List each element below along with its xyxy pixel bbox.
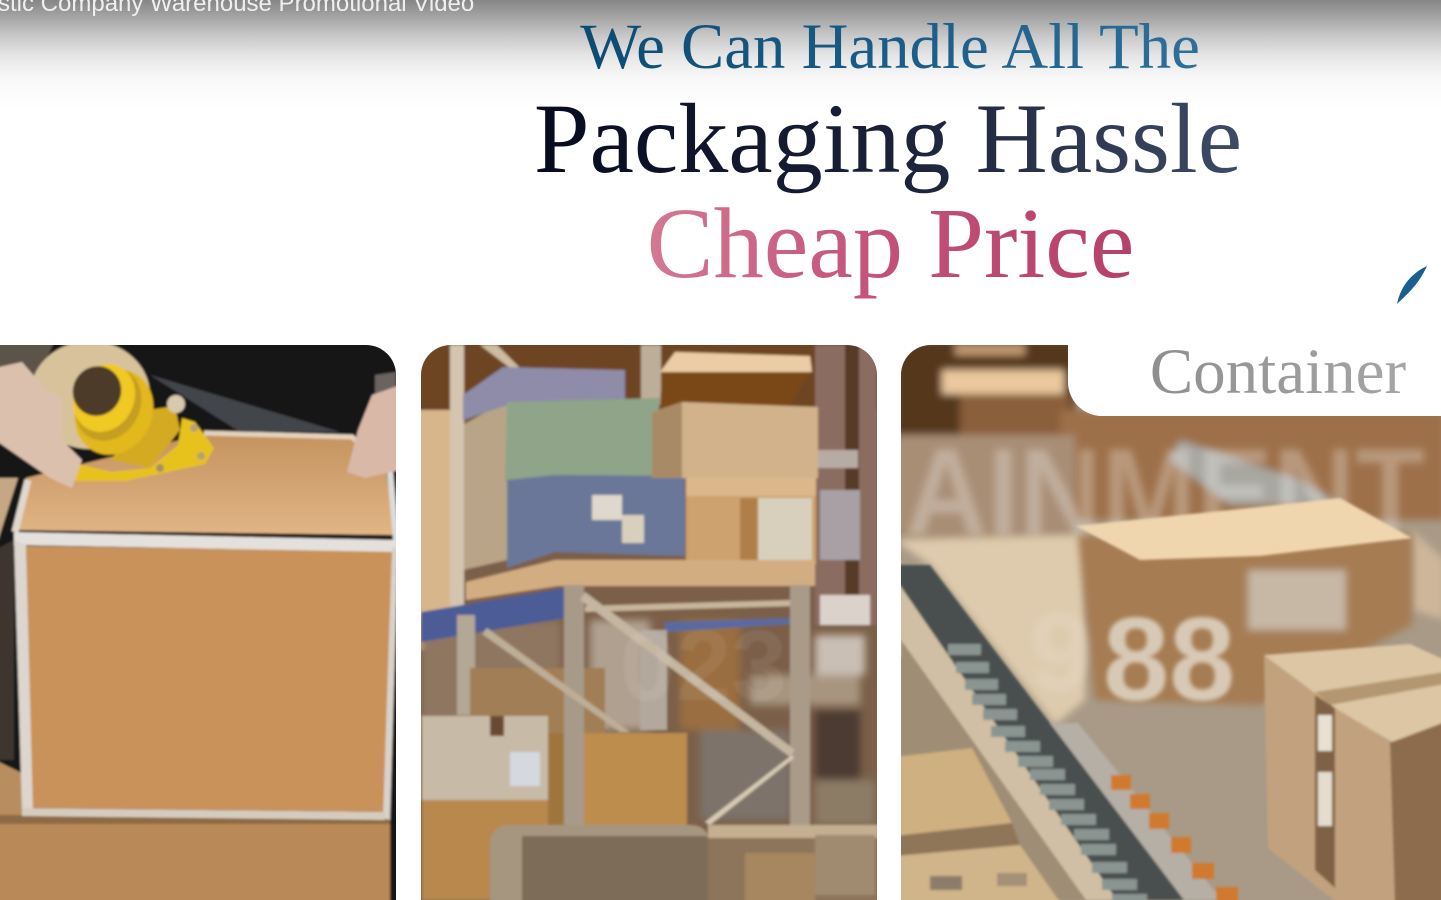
box front: [26, 546, 392, 812]
container label tab: [1068, 345, 1441, 416]
box top: [15, 434, 395, 535]
cream conveyor surface: [895, 535, 1085, 725]
stretch film: [150, 375, 340, 432]
tape dispenser: [74, 416, 214, 482]
blurred carton on conveyor: [1078, 535, 1412, 705]
orange rollers: [1111, 775, 1238, 900]
bottom right cartons: [708, 838, 877, 900]
lower background patches: [421, 620, 875, 825]
container label text: Container: [1150, 336, 1406, 408]
lower cartons: [470, 668, 605, 734]
rollers: [948, 644, 1147, 900]
blue crate: [507, 475, 685, 568]
right side rack: [815, 345, 877, 625]
pallet deck: [466, 560, 815, 600]
conveyor rails and belt: [901, 563, 1441, 900]
panel: conveyor belt: 9: [1030, 591, 1091, 714]
hands: [0, 362, 82, 488]
green crate: [505, 398, 660, 482]
cartons: [680, 400, 820, 480]
heading line 3: Cheap Price: [647, 188, 1134, 299]
blue beams: [421, 588, 565, 642]
faded watermark: 023: [620, 610, 787, 722]
tape roll: [30, 341, 150, 449]
lower posts and braces: [564, 585, 584, 825]
grey bin: [490, 825, 710, 900]
heading line 2: Packaging Hassle: [534, 83, 1242, 194]
open carton flap: [660, 372, 810, 408]
purple crate: [463, 367, 625, 420]
uprights: [450, 345, 464, 615]
lower-left cartons: [895, 748, 1012, 836]
left background cartons: [421, 408, 452, 651]
heading line 1: We Can Handle All The: [580, 11, 1200, 83]
panel: conveyor belt: [901, 345, 1441, 900]
blurred phone digits: 88: [1103, 593, 1235, 726]
front carton: [1264, 655, 1398, 900]
top gradient band: [0, 0, 1441, 115]
panel: taping a box: [0, 345, 396, 900]
panel: warehouse shelves: [421, 345, 877, 900]
icon: blue feather: [1397, 266, 1427, 304]
lower uprights: [457, 615, 475, 715]
